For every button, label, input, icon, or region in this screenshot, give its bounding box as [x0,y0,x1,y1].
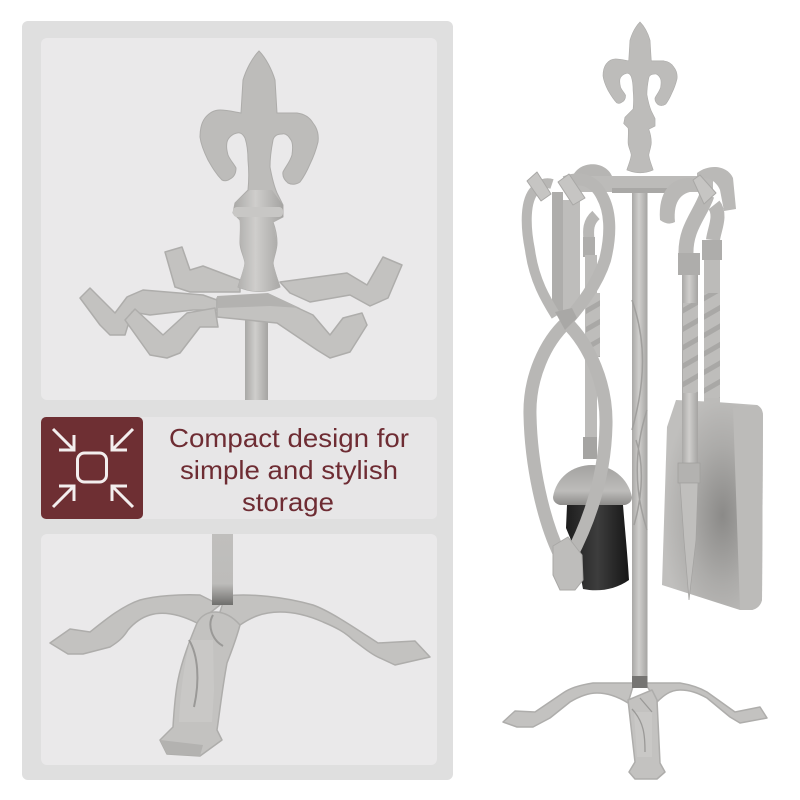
tripod base [50,595,430,756]
shaft [212,534,233,605]
hook arms [80,247,402,358]
shovel back handle [702,205,722,410]
caption text: simple and stylish [180,455,398,485]
brush bell [553,465,632,505]
stand shaft [632,190,648,688]
panel: top close-up of finial [41,38,437,400]
shaft below hub [245,315,268,400]
brush handle [583,215,600,459]
caption text: storage [242,487,334,517]
panel: bottom close-up of base [41,534,437,765]
tongs [527,172,609,590]
brush bristles [566,505,629,590]
caption text: Compact design for [169,423,409,453]
caption text [169,423,409,517]
stand base [503,676,767,779]
panel: left grey backdrop [22,21,453,780]
stand ring and back hooks [572,164,736,224]
finial [603,22,677,173]
fleur-de-lis finial [200,51,318,292]
icon: compress arrows [41,417,143,519]
turned knob highlight [233,190,283,292]
shovel body [662,400,763,610]
panel: caption strip [41,417,437,519]
product: full tool set [503,22,767,779]
shovel front handle [678,175,716,600]
